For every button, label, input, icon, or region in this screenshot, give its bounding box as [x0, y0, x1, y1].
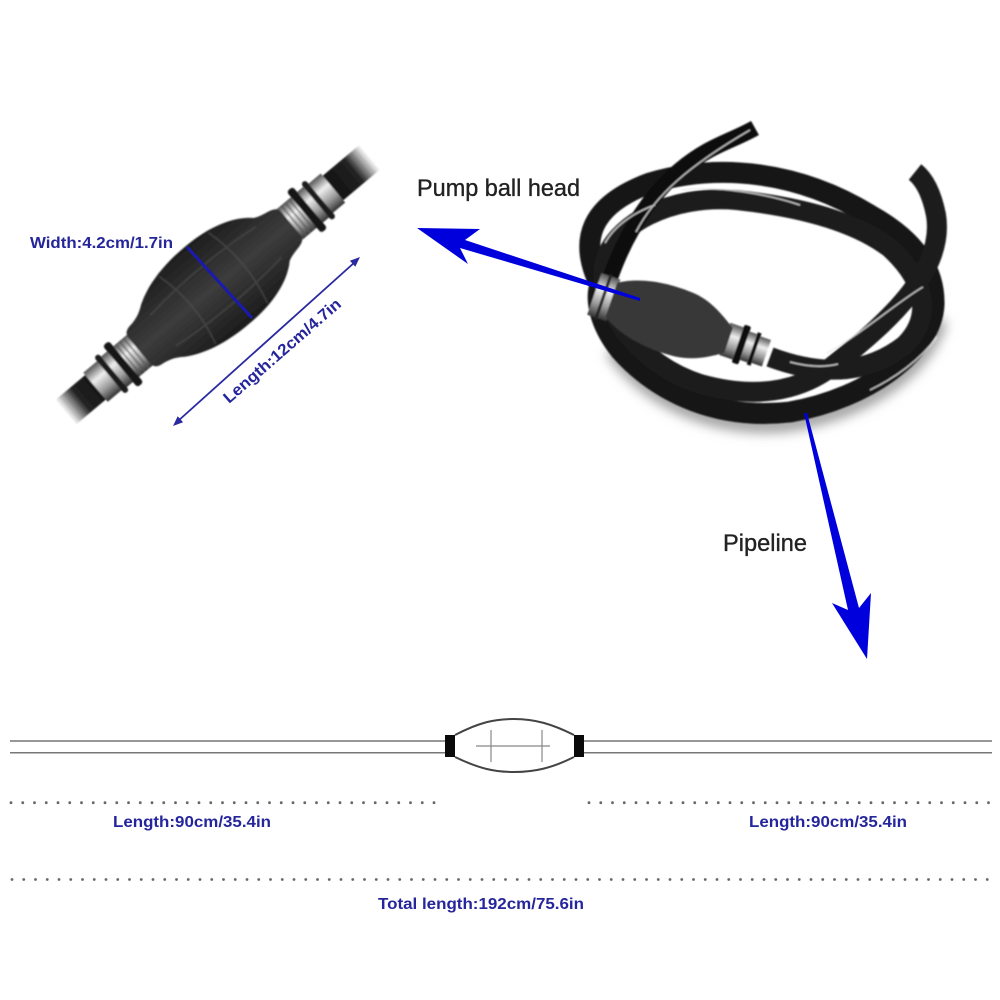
coil shadow: [612, 320, 940, 425]
total dotted span: [12, 878, 990, 881]
hose diagram: [10, 719, 992, 772]
label: width: Width:4.2cm/1.7in: [30, 235, 173, 252]
label: bulb length: Length:12cm/4.7in: [220, 296, 345, 407]
coil right fitting: [718, 320, 773, 372]
label: total length: Total length:192cm/75.6in: [378, 896, 584, 913]
hose free end: [610, 128, 755, 278]
hose loop outer: [590, 172, 934, 413]
label: pipeline: Pipeline: [723, 530, 807, 557]
hose loop inner with end: [603, 172, 937, 392]
diagram left cap: [445, 735, 455, 757]
bulb ribs: [133, 207, 298, 366]
hose highlights: [605, 130, 937, 390]
diagram left hose: [10, 741, 445, 753]
arrow: to pipeline: [804, 413, 871, 659]
right hose stub: [320, 145, 380, 203]
rubber bulb: [107, 185, 323, 389]
right dotted span: [589, 801, 990, 804]
length measure arrow: [173, 257, 360, 426]
diagram right cap: [574, 735, 584, 757]
left dotted span: [11, 801, 435, 804]
label: left length: Length:90cm/35.4in: [113, 814, 271, 831]
label: right length: Length:90cm/35.4in: [749, 814, 907, 831]
label: pump ball head: Pump ball head: [417, 175, 580, 202]
right fitting: [268, 167, 350, 249]
diagram bulb outline: [455, 719, 574, 772]
photo: coiled hose with pump: [583, 128, 940, 425]
arrow: to pump ball head: [417, 228, 640, 301]
left fitting: [78, 325, 162, 408]
width measure line: [187, 247, 252, 318]
diagram right hose: [584, 741, 992, 753]
coil bulb: [600, 268, 740, 372]
left hose stub: [55, 368, 114, 425]
diagram bulb ribs: [476, 730, 550, 762]
coil left fitting: [587, 271, 621, 323]
photo: pump ball close-up: [33, 119, 402, 451]
